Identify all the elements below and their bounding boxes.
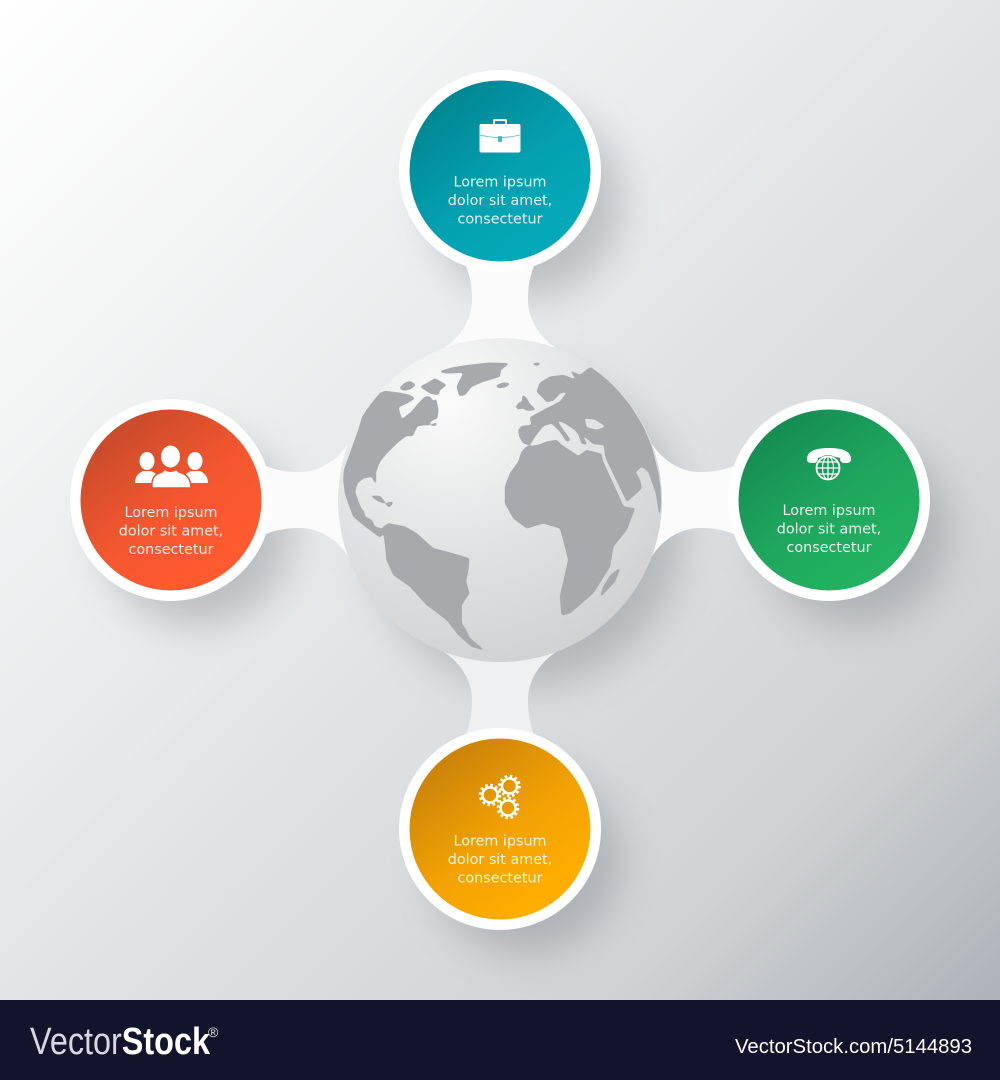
icon: gears	[480, 776, 519, 818]
text: bottom circle label: Lorem ipsum	[453, 834, 547, 850]
connectors	[258, 258, 742, 742]
text: left circle label: consectetur	[128, 542, 214, 558]
text: left circle label: dolor sit amet,	[119, 524, 223, 540]
world map continents	[343, 363, 662, 651]
text: right circle label: Lorem ipsum	[782, 503, 876, 519]
text: right circle label: consectetur	[786, 540, 872, 556]
text: bottom circle label: dolor sit amet,	[448, 852, 552, 868]
text: top circle label: dolor sit amet,	[448, 193, 552, 209]
panel: top teal circle	[399, 70, 601, 272]
panel: right green circle	[728, 399, 930, 601]
text: top circle label: Lorem ipsum	[453, 174, 547, 190]
globe	[338, 338, 662, 662]
drop shadows	[102, 106, 950, 954]
icon: people	[135, 446, 208, 488]
text: top circle label: consectetur	[458, 212, 543, 228]
text: right circle label: dolor sit amet,	[777, 522, 881, 538]
logo: registered mark: ®	[208, 1024, 219, 1040]
text: left circle label: Lorem ipsum	[124, 505, 218, 521]
panel: left red circle	[70, 399, 272, 601]
text: bottom circle label: consectetur	[458, 870, 543, 886]
icon: briefcase	[480, 119, 520, 152]
footer bar	[0, 1000, 1000, 1080]
icon: phone with globe	[807, 448, 851, 481]
text: image id: VectorStock.com/5144893	[735, 1036, 972, 1058]
logo: VectorStock: VectorStock	[30, 1021, 211, 1063]
panel: bottom orange circle	[399, 728, 601, 930]
